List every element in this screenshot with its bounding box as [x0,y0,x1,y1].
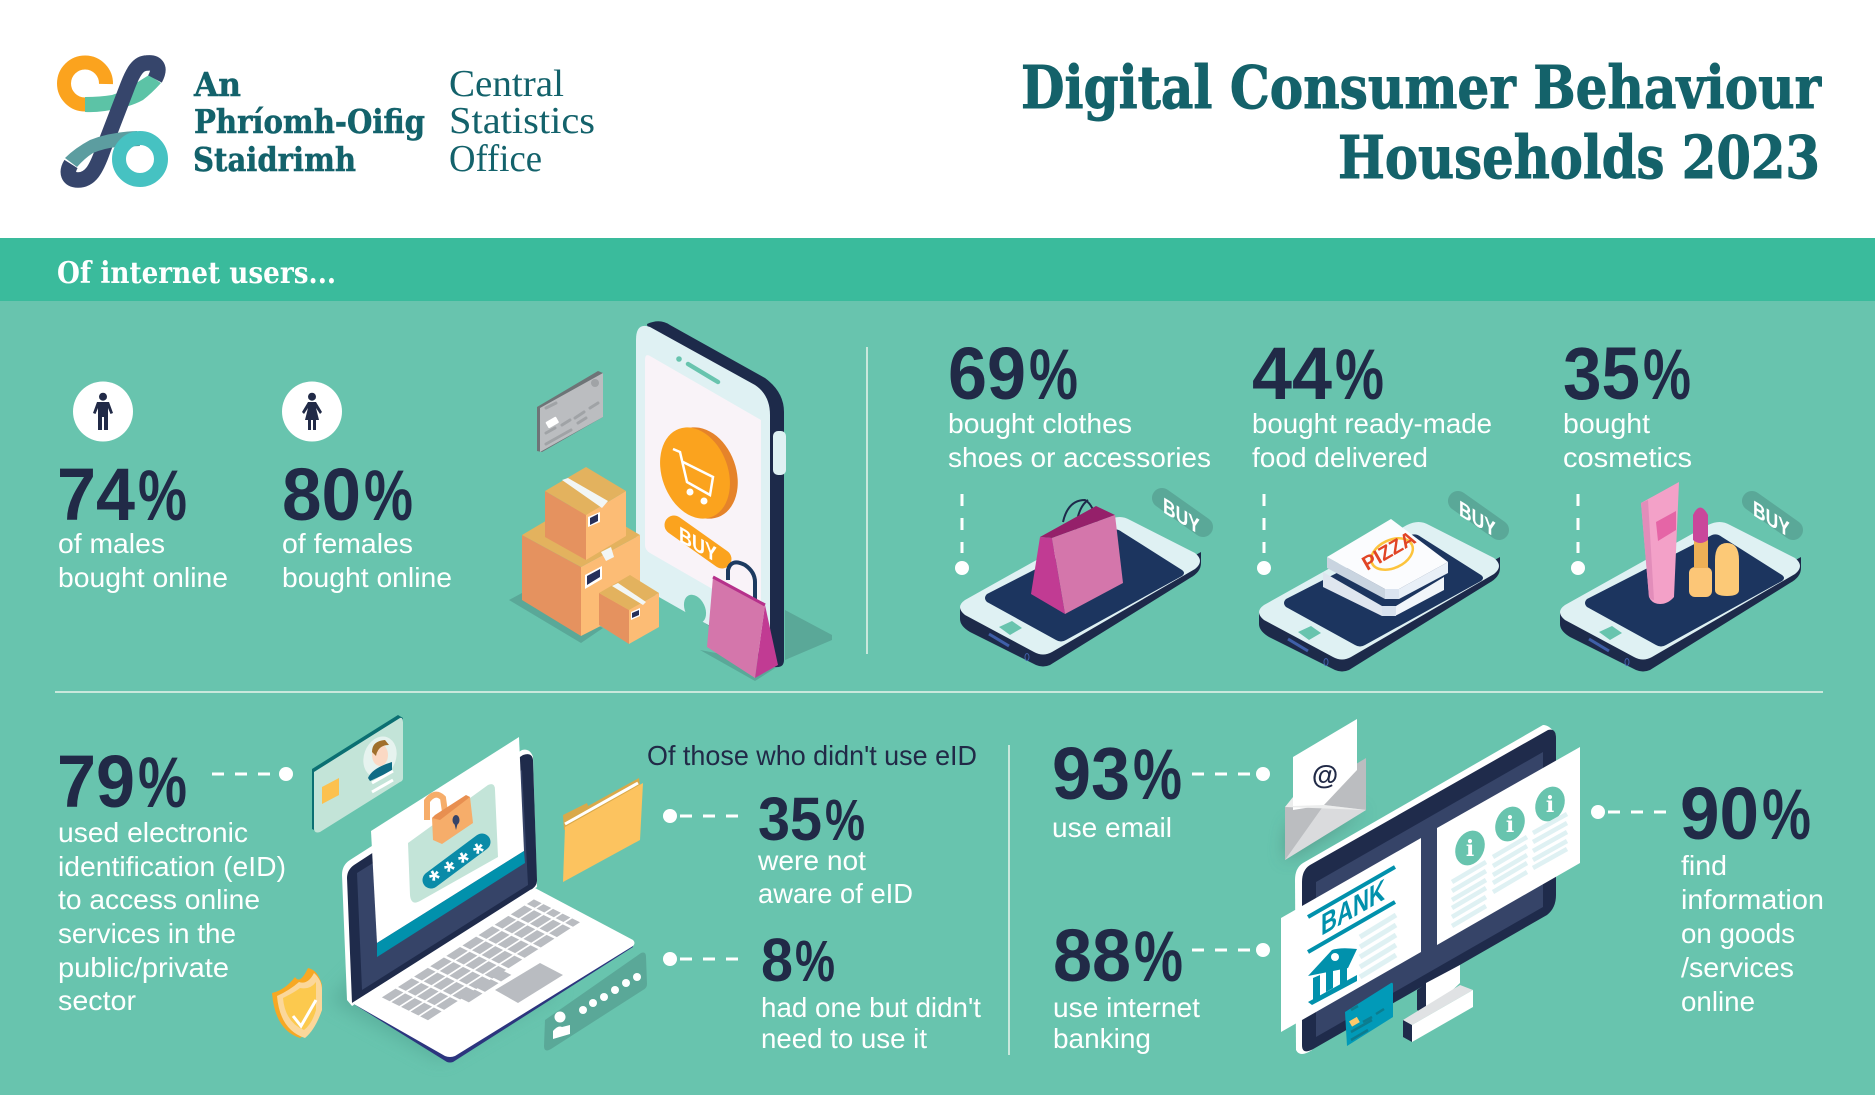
panel: females stat: bought online [282,562,452,593]
illustration: phone with boxes and bag [509,321,832,681]
icon: male person [73,382,133,442]
stat: cosmetics: cosmetics [1563,442,1692,473]
stat: clothes: bought clothes [948,408,1132,439]
stat: cosmetics [1563,332,1692,473]
stat: food: food delivered [1252,442,1428,473]
illustration: laptop with login: * [468,836,493,868]
stat: electronic identification: 79 [57,740,135,823]
stat: not aware of eID: % [825,788,865,853]
stat: electronic identification: to access online [58,884,260,915]
stat: clothes: shoes or accessories [948,442,1211,473]
stat: electronic identification: sector [58,985,136,1016]
stat: information on goods: find [1681,850,1727,881]
logo mark [64,63,161,180]
logo text: Irish name: An [193,65,241,104]
stat: information on goods: 90 [1680,772,1759,855]
stat: not aware of eID: 35 [758,785,822,853]
stat: clothes: % [1029,336,1078,415]
illustration: monitor with bank and info pages: BANK [1321,873,1385,943]
stat: internet banking: banking [1053,1023,1151,1054]
stat: information on goods: on goods [1681,918,1795,949]
stat: cosmetics: bought [1563,408,1650,439]
logo text: Irish name [193,65,425,179]
logo text: Irish name: Staidrimh [193,140,356,179]
illustration: phone with pizza boxes: BUY [1459,495,1496,543]
stat: email: % [1133,736,1182,815]
illustration: phone with pizza boxes [1259,495,1500,672]
icon: blue bank card [1345,983,1393,1046]
icon: female person [282,382,342,442]
stat: food: 44 [1252,332,1332,415]
panel: females stat [282,382,452,593]
heading: those who didn't use eID: Of those who didn't use eID [647,740,977,771]
section band [0,238,1875,301]
stat: information on goods: online [1681,986,1755,1017]
stat: no need for eID: need to use it [761,1023,927,1054]
illustration: phone with cosmetics [1560,482,1801,672]
stat: information on goods: /services [1681,952,1794,983]
stat: food: % [1335,336,1384,415]
stat: no need for eID: 8 [761,926,793,994]
illustration: monitor with bank and info pages: i [1506,812,1514,838]
panel: females stat: % [364,457,413,536]
icon: shield [272,968,322,1038]
stat: no need for eID: had one but didn't [761,992,981,1023]
section band: Of internet users... [57,256,336,291]
stat: cosmetics: 35 [1563,332,1640,415]
icon: password card [544,952,647,1050]
panel: males stat: of males [58,528,165,559]
stat: information on goods [1680,772,1824,1017]
stat: information on goods: information [1681,884,1824,915]
stat: internet banking: 88 [1053,914,1131,997]
illustration: phone with boxes and bag: BUY [679,521,717,568]
logo text: English name: Central [449,63,564,105]
stat: not aware of eID: aware of eID [758,878,913,909]
stat: internet banking: use internet [1053,992,1200,1023]
logo text: Irish name: Phríomh-Oifig [194,102,425,141]
illustration: laptop with login: * [424,863,449,895]
stat: electronic identification: identification (eID) [58,851,286,882]
icon: envelope [1285,719,1366,860]
panel: males stat: % [138,457,187,536]
stat: email: use email [1052,812,1172,843]
illustration: laptop with login [272,715,647,1062]
stat: email [1052,732,1182,843]
title [1021,53,1822,192]
stat: food: bought ready-made [1252,408,1492,439]
stat: no need for eID: % [795,929,835,994]
illustration: phone with pizza boxes: PIZZA [1358,527,1420,575]
panel: females stat: of females [282,528,413,559]
stat: clothes: 69 [948,332,1026,415]
illustration: monitor with bank and info pages [1281,719,1580,1054]
stat: internet banking [1053,914,1200,1054]
stat: not aware of eID [757,785,913,909]
stat: no need for eID [761,926,981,1054]
stat: electronic identification: % [138,744,187,823]
illustration: phone with shopping bag: BUY [1163,492,1200,540]
stat: electronic identification: services in the [58,918,236,949]
logo text: English name: Office [449,138,542,180]
illustration: monitor with bank and info pages: i [1546,792,1554,818]
stat: food [1252,332,1492,473]
icon: credit card [537,371,603,452]
panel: males stat [57,382,228,593]
stat: electronic identification: used electronic [58,817,248,848]
illustration: phone with cosmetics: BUY [1753,495,1790,543]
stat: not aware of eID: were not [757,845,866,876]
stat: electronic identification [57,740,286,1016]
stat: clothes [948,332,1211,473]
illustration: laptop with login: * [439,854,464,886]
logo text: English name [449,63,595,180]
icon: folder [563,778,643,882]
panel: males stat: bought online [58,562,228,593]
logo text: English name: Statistics [449,100,595,142]
icon: envelope: @ [1312,760,1338,790]
stat: information on goods: % [1762,776,1811,855]
stat: internet banking: % [1134,918,1183,997]
panel: males stat: 74 [57,453,135,536]
illustration: phone with shopping bag [960,492,1203,666]
stat: email: 93 [1052,732,1130,815]
stat: electronic identification: public/private [58,952,229,983]
icon: ID card [312,715,403,832]
stat: cosmetics: % [1643,336,1691,415]
illustration: laptop with login: * [453,845,478,877]
panel: females stat: 80 [282,453,361,536]
illustration: monitor with bank and info pages: i [1466,836,1474,862]
